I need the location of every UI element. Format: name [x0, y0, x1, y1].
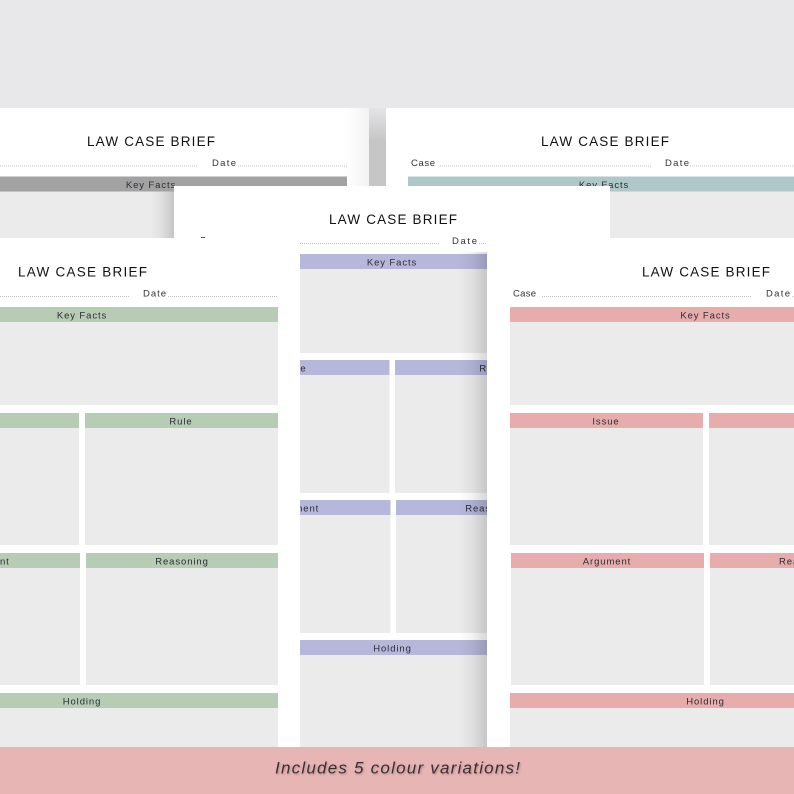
rule: green sheet	[85, 413, 278, 545]
sheet: purple variation (centre)	[174, 186, 610, 748]
key facts bar: teal sheet: Key Facts	[579, 180, 629, 191]
case and date fields: pink sheet	[513, 288, 794, 300]
rule: purple sheet	[395, 360, 503, 493]
argument: green sheet	[0, 553, 80, 685]
argument: pink sheet: Argument	[583, 556, 631, 568]
key facts: pink sheet	[510, 307, 794, 405]
holding: pink sheet	[510, 693, 794, 747]
title: purple sheet: LAW CASE BRIEF	[329, 212, 457, 227]
clipped case label: purple sheet	[201, 237, 205, 238]
key facts: green sheet: Key Facts	[57, 310, 107, 322]
issue: pink sheet: Issue	[592, 416, 620, 428]
case and date fields: pink sheet: Date	[766, 288, 790, 300]
issue: purple sheet	[279, 360, 390, 493]
title: teal sheet: LAW CASE BRIEF	[541, 134, 669, 149]
case and date fields: pink sheet: Case	[513, 288, 536, 300]
title: pink sheet: LAW CASE BRIEF	[642, 264, 770, 280]
holding: green sheet	[0, 693, 278, 747]
rule: green sheet: Rule	[169, 416, 193, 428]
holding: pink sheet: Holding	[686, 696, 725, 708]
key facts: pink sheet: Key Facts	[680, 310, 731, 322]
sheet: grey variation (back left)	[0, 108, 369, 252]
reasoning: purple sheet: Reasoning	[465, 504, 519, 514]
rule: purple sheet: Rule	[479, 364, 503, 374]
shadow beside grey sheet	[345, 108, 369, 248]
key facts: purple sheet: Key Facts	[367, 258, 417, 268]
holding: purple sheet: Holding	[373, 644, 412, 654]
key facts panel: teal sheet	[408, 192, 794, 238]
date field: purple sheet: Date	[452, 236, 477, 247]
key facts: green sheet	[0, 307, 278, 405]
argument: purple sheet: Argument	[271, 504, 319, 514]
issue: green sheet	[0, 413, 79, 545]
argument: pink sheet	[511, 553, 704, 685]
key facts bar: grey sheet	[0, 176, 347, 192]
key facts panel: grey sheet	[0, 192, 347, 252]
banner caption: Includes 5 colour variations!	[275, 758, 520, 778]
sheet: teal variation (back right)	[386, 108, 794, 250]
holding: green sheet: Holding	[63, 696, 101, 708]
sheet: green variation (front left)	[0, 238, 300, 748]
reasoning: green sheet	[86, 553, 278, 685]
case and date fields: teal sheet: Case	[411, 158, 435, 169]
gap shadow between back sheets	[369, 108, 386, 240]
banner	[0, 747, 794, 794]
date field: grey sheet: Date	[212, 158, 236, 169]
case and date fields: teal sheet	[411, 158, 794, 169]
key facts bar: grey sheet: Key Facts	[126, 180, 176, 191]
title: green sheet: LAW CASE BRIEF	[18, 264, 147, 280]
shadow cast by pink sheet	[458, 252, 487, 747]
issue: pink sheet	[510, 413, 703, 545]
key facts: purple sheet	[300, 254, 487, 353]
reasoning: green sheet: Reasoning	[155, 556, 209, 568]
title: grey sheet: LAW CASE BRIEF	[87, 134, 215, 149]
reasoning: purple sheet	[396, 500, 519, 633]
rule: pink sheet	[709, 413, 794, 545]
date field: green sheet: Date	[143, 288, 166, 300]
key facts bar: teal sheet	[408, 176, 794, 192]
argument: green sheet: nt	[0, 556, 10, 568]
holding: purple sheet	[300, 640, 487, 747]
shadow cast by centre sheet	[150, 192, 174, 238]
case and date fields: teal sheet: Date	[665, 158, 689, 169]
sheet: pink variation (front right)	[487, 238, 794, 748]
issue: purple sheet: Issue	[279, 364, 307, 374]
reasoning: pink sheet	[710, 553, 794, 685]
argument: purple sheet	[271, 500, 390, 633]
